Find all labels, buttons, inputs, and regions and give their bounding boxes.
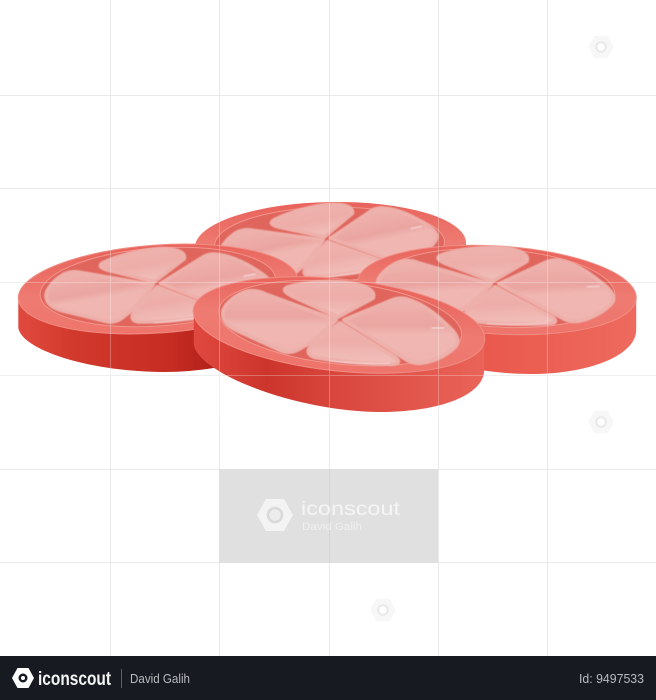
footer logo — [12, 668, 34, 688]
footer id: Id: 9497533 — [579, 671, 644, 686]
watermark brand: iconscout — [301, 499, 401, 520]
coin: right — [355, 238, 639, 374]
small watermark top right — [588, 36, 614, 58]
coin: front — [188, 264, 490, 412]
coin: back — [194, 183, 467, 313]
footer bar — [0, 656, 656, 700]
coin: left — [15, 230, 301, 372]
small watermark bottom — [370, 599, 396, 621]
footer author: David Galih — [130, 671, 190, 686]
grid overlay — [0, 200, 656, 420]
small watermark middle right — [588, 411, 614, 433]
watermark author: David Galih — [302, 521, 362, 533]
footer brand: iconscout — [38, 669, 112, 690]
watermark panel — [219, 469, 438, 563]
watermark logo — [257, 499, 293, 531]
